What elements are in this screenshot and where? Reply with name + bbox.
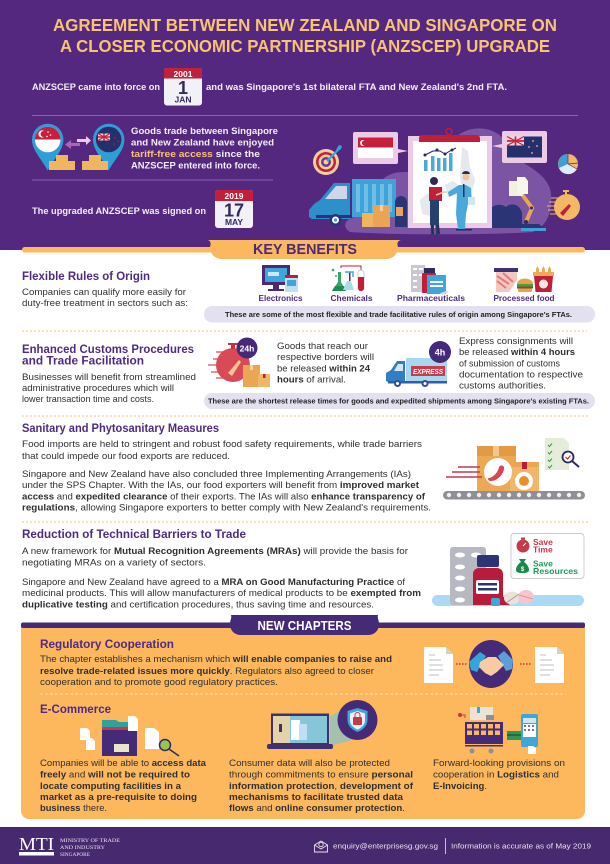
logo: MTI: MINISTRY OF TRADE bbox=[60, 838, 120, 844]
text: consumer data: flows and online consumer protection. bbox=[229, 803, 405, 814]
text: 4 hours bbox=[459, 336, 583, 392]
section: technical barriers to trade bbox=[22, 529, 584, 610]
callout: release times bbox=[204, 393, 595, 409]
icon: calendar 17 May 2019 bbox=[215, 190, 253, 228]
callout: release times: These are the shortest release times for goods and expedited shipments among Singapore's existing FTAs. bbox=[208, 396, 589, 405]
icon: dark bushes and robot arm bbox=[492, 177, 546, 231]
heading: Reduction of Technical Barriers to Trade bbox=[22, 529, 246, 541]
icon: express delivery truck bbox=[386, 341, 451, 387]
icon: goods boxes bbox=[49, 155, 108, 170]
body text: regulatory cooperation: cooperation and to promote good regulatory practices. bbox=[40, 677, 278, 688]
icon: calendar 17 May 2019: 2019 bbox=[225, 191, 244, 201]
text: accuracy note: Information is accurate as of May 2019 bbox=[451, 842, 591, 851]
text: consumer data: mechanisms to facilitate trusted data bbox=[229, 792, 404, 803]
icon: express delivery truck: 4h bbox=[435, 348, 445, 358]
body text: negotiating MRAs on a variety of sectors. bbox=[22, 558, 206, 568]
icon: Singapore flag bubble bbox=[353, 132, 408, 164]
title bbox=[53, 15, 557, 56]
icon: money bag: $ bbox=[521, 567, 525, 573]
body text: that could impede our food exports are reduced. bbox=[22, 451, 230, 462]
icon: calendar 1 Jan 2001: 2001 bbox=[174, 69, 193, 79]
text: access data: locate computing facilities in a bbox=[40, 781, 182, 792]
panel: new chapters bbox=[21, 615, 585, 819]
body text: Food imports are held to stringent and robust food safety requirements, while trade barriers bbox=[22, 439, 422, 450]
text: save resources: Save bbox=[533, 558, 553, 568]
icon: New Zealand flag bubble bbox=[492, 131, 547, 163]
title: AGREEMENT BETWEEN NEW ZEALAND AND SINGAPORE ON bbox=[53, 15, 557, 35]
text: logistics and e-invoicing: cooperation in Logistics and bbox=[433, 770, 559, 780]
text: tariff-free access: Goods trade between Singapore bbox=[131, 126, 278, 136]
icon: data folder and magnifier bbox=[80, 716, 179, 756]
heading: Flexible Rules of Origin bbox=[22, 271, 150, 283]
icon: truck with container bbox=[309, 179, 407, 227]
body text: regulatory cooperation: The chapter establishes a mechanism which will enable companies to raise and bbox=[40, 654, 392, 665]
body text: regulatory cooperation bbox=[40, 654, 392, 688]
body text: Businesses will benefit from streamlined bbox=[22, 372, 196, 383]
body text: Companies can qualify more easily for bbox=[22, 287, 186, 298]
section: sanitary and phytosanitary measures bbox=[22, 423, 585, 514]
text: save resources: Resources bbox=[533, 566, 578, 576]
body text: under the SPS Chapter. With the IAs, our food exporters will benefit from improved market bbox=[22, 480, 420, 491]
icon: electronics bbox=[262, 265, 298, 292]
text: consumer data bbox=[229, 758, 414, 814]
text: upgrade signed: The upgraded ANZSCEP was signed on bbox=[32, 206, 206, 216]
text: logistics and e-invoicing: E-Invoicing. bbox=[433, 781, 487, 792]
text: entry into force bbox=[32, 82, 507, 92]
icon: calendar 17 May 2019: MAY bbox=[225, 217, 243, 227]
heading: and Trade Facilitation bbox=[22, 356, 144, 368]
icon: 24h stopwatch and boxes: 24h bbox=[240, 344, 254, 354]
body text bbox=[22, 546, 421, 610]
icon: calendar 1 Jan 2001 bbox=[164, 68, 202, 106]
text: tariff-free access: ANZSCEP entered into force. bbox=[131, 160, 260, 170]
icon: food boxes on conveyor bbox=[443, 438, 585, 500]
text: 4 hours: be released within 4 hours bbox=[459, 347, 575, 358]
band: key benefits bbox=[22, 240, 585, 259]
sector labels: Pharmaceuticals bbox=[397, 294, 466, 303]
icon: target bbox=[313, 145, 342, 175]
heading: new chapters: NEW CHAPTERS bbox=[258, 619, 352, 633]
text: tariff-free access bbox=[131, 126, 278, 170]
body text: A new framework for Mutual Recognition Agreements (MRAs) will provide the basis for bbox=[22, 546, 408, 557]
text: 4 hours: customs authorities. bbox=[459, 380, 546, 392]
body text: Singapore and New Zealand have also concluded three Implementing Arrangements (IAs) bbox=[22, 469, 411, 480]
sector labels: Chemicals bbox=[330, 294, 373, 303]
text: access data: market as a pre-requisite to doing bbox=[40, 792, 197, 803]
body text: lower transaction time and costs. bbox=[22, 394, 154, 405]
icon: laptop with security shield bbox=[267, 700, 378, 749]
logo: MTI bbox=[19, 834, 120, 858]
icon: express delivery truck: EXPRESS bbox=[413, 367, 443, 376]
text: access data: Companies will be able to access data bbox=[40, 758, 207, 769]
text: save time bbox=[533, 537, 553, 554]
icon: medicine bbox=[432, 547, 584, 606]
text: access data bbox=[40, 758, 207, 814]
body text: duplicative testing and certification procedures, thus saving time and resources. bbox=[22, 600, 374, 610]
text: consumer data: Consumer data will also be protected bbox=[229, 758, 390, 769]
icon: calendar 1 Jan 2001: JAN bbox=[174, 94, 192, 104]
text: 4 hours: Express consignments will bbox=[459, 336, 573, 347]
callout: save time, save resources bbox=[511, 534, 584, 578]
title: A CLOSER ECONOMIC PARTNERSHIP (ANZSCEP) UPGRADE bbox=[60, 36, 550, 56]
icon: calendar 1 Jan 2001: 1 bbox=[178, 78, 188, 98]
icon: envelope bbox=[314, 841, 328, 852]
logo: MTI: MTI bbox=[19, 834, 54, 854]
body text bbox=[22, 372, 196, 405]
callout: rules of origin: These are some of the most flexible and trade facilitative rules of origin among Singapore's FTAs. bbox=[225, 310, 572, 319]
icon: calendar 17 May 2019: 17 bbox=[224, 200, 244, 220]
panel: purple header bbox=[0, 0, 610, 250]
icon: whiteboard with chart and handshake bbox=[408, 128, 492, 235]
text: 4 hours: of submission of customs bbox=[459, 358, 560, 370]
text: 24 hours: respective borders will bbox=[277, 352, 374, 363]
body text: regulations, allowing Singapore exporters to better comply with New Zealand's requirements. bbox=[22, 502, 431, 514]
section: customs procedures bbox=[22, 336, 595, 409]
heading: regulatory cooperation: Regulatory Cooperation bbox=[40, 639, 174, 651]
text: logistics and e-invoicing: Forward-looking provisions on bbox=[433, 758, 565, 769]
text: 24 hours: be released within 24 bbox=[277, 364, 371, 374]
body text: regulatory cooperation: resolve trade-related issues more quickly . Regulators also agreed to closer bbox=[40, 666, 374, 677]
body text bbox=[22, 287, 188, 309]
icon: Singapore pin bbox=[32, 124, 63, 170]
heading: key benefits: KEY BENEFITS bbox=[253, 241, 357, 258]
text: consumer data: through commitments to ensure personal bbox=[229, 770, 413, 780]
icon: pharmaceuticals bbox=[411, 265, 449, 295]
sector labels bbox=[258, 294, 555, 303]
heading bbox=[22, 344, 194, 368]
text: tariff-free access: tariff-free access since the bbox=[131, 149, 260, 159]
icon: processed food bbox=[494, 266, 554, 292]
text: access data: business there. bbox=[40, 803, 107, 814]
body text: Singapore and New Zealand have agreed to a MRA on Good Manufacturing Practice of bbox=[22, 577, 405, 588]
text: 24 hours bbox=[277, 341, 374, 386]
icon: pie chart bbox=[558, 154, 578, 174]
section: flexible rules of origin bbox=[22, 265, 595, 322]
text: entry into force: and was Singapore's 1st bilateral FTA and New Zealand's 2nd FTA. bbox=[206, 82, 507, 92]
text: 24 hours: hours of arrival. bbox=[277, 374, 346, 386]
text: email: enquiry@enterprisesg.gov.sg bbox=[333, 842, 438, 851]
footer bbox=[0, 827, 610, 864]
text: entry into force: ANZSCEP came into force on bbox=[32, 82, 160, 92]
heading: e-commerce: E-Commerce bbox=[40, 704, 111, 716]
body text: administrative procedures which will bbox=[22, 383, 174, 394]
text: logistics and e-invoicing bbox=[433, 758, 565, 792]
body text bbox=[22, 439, 431, 514]
body text: medicinal products. This will allow manufacturers of medical products to be exempted from bbox=[22, 588, 421, 599]
icon: shopping cart and mobile payment bbox=[458, 707, 538, 754]
logo: MTI: AND INDUSTRY bbox=[60, 845, 105, 851]
heading: Sanitary and Phytosanitary Measures bbox=[22, 423, 219, 435]
icon: 24h stopwatch and boxes bbox=[208, 338, 270, 387]
icon: New Zealand pin bbox=[93, 124, 124, 170]
heading: Enhanced Customs Procedures bbox=[22, 344, 194, 356]
body text: duty-free treatment in sectors such as: bbox=[22, 298, 188, 309]
text: save time: Time bbox=[533, 544, 553, 554]
sector labels: Processed food bbox=[494, 294, 555, 303]
icon: two-way trade arrows bbox=[65, 136, 91, 149]
illustration: trade partnership scene bbox=[309, 128, 580, 235]
text: save time: Save bbox=[533, 537, 553, 547]
text: tariff-free access: and New Zealand have enjoyed bbox=[131, 138, 274, 148]
sector labels: Electronics bbox=[258, 294, 303, 303]
icon: documents and handshake bbox=[424, 640, 564, 688]
text: 24 hours: Goods that reach our bbox=[277, 341, 368, 352]
body text: access and expedited clearance of their exports. The IAs will also enhance transparency of bbox=[22, 492, 426, 502]
text: 4 hours: documentation to respective bbox=[459, 370, 583, 380]
text: access data: freely and will not be required to bbox=[40, 770, 190, 780]
text: save resources bbox=[533, 558, 578, 576]
text: consumer data: information protection , development of bbox=[229, 781, 414, 792]
icon: stopwatch bbox=[516, 538, 530, 552]
icon: stopwatch bbox=[547, 190, 580, 220]
icon: chemicals bbox=[332, 266, 364, 291]
callout: rules of origin bbox=[204, 306, 595, 322]
logo: MTI: SINGAPORE bbox=[60, 852, 90, 858]
